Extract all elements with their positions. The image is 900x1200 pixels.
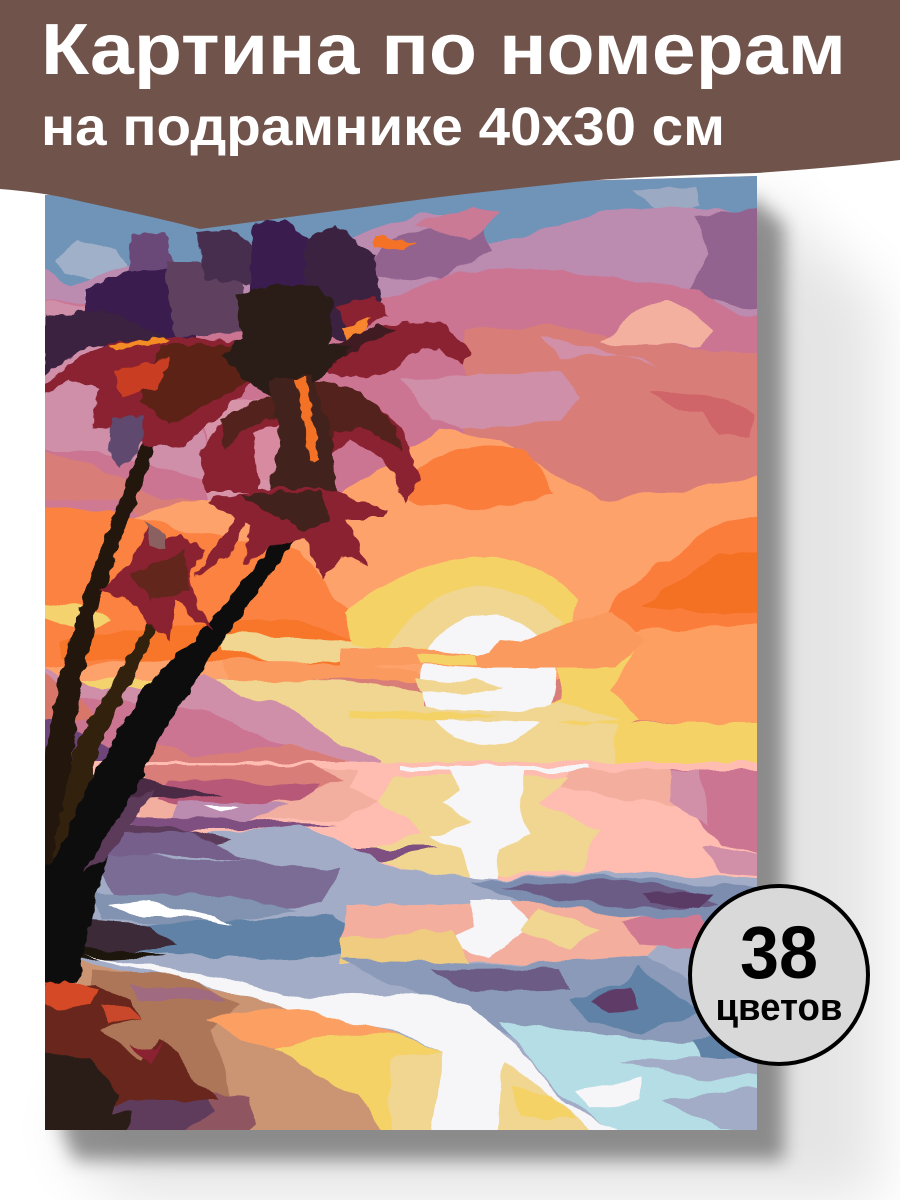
palm trunks — [45, 442, 295, 984]
sand — [45, 960, 589, 1130]
sky: orange clouds — [20, 430, 780, 725]
waves — [80, 774, 757, 1126]
badge: 38 colours: цветов — [716, 987, 842, 1029]
lower right frond — [314, 381, 422, 504]
canvas shadow — [60, 190, 880, 1200]
subtitle: на подрамнике 40х30 см — [41, 97, 725, 157]
sun and glow — [340, 557, 645, 745]
small palm — [100, 520, 212, 640]
left frond — [45, 310, 262, 468]
lower left frond — [200, 395, 292, 492]
lower crown — [195, 488, 388, 578]
horizon glow — [80, 633, 780, 770]
upper purple fronds — [85, 218, 415, 348]
crown centre — [222, 285, 352, 497]
shore foam — [85, 955, 780, 1140]
header banner — [0, 0, 900, 229]
foreground plants — [45, 980, 256, 1130]
right frond — [327, 320, 472, 378]
title: Картина по номерам — [41, 10, 846, 90]
sky: upper bands — [45, 176, 757, 518]
palm crowns — [45, 218, 472, 640]
badge: 38 colours: 38 — [740, 911, 818, 994]
badge: 38 colours — [690, 886, 868, 1064]
painting — [20, 170, 780, 1140]
mountains left — [45, 668, 382, 763]
sea reflection — [72, 760, 757, 882]
